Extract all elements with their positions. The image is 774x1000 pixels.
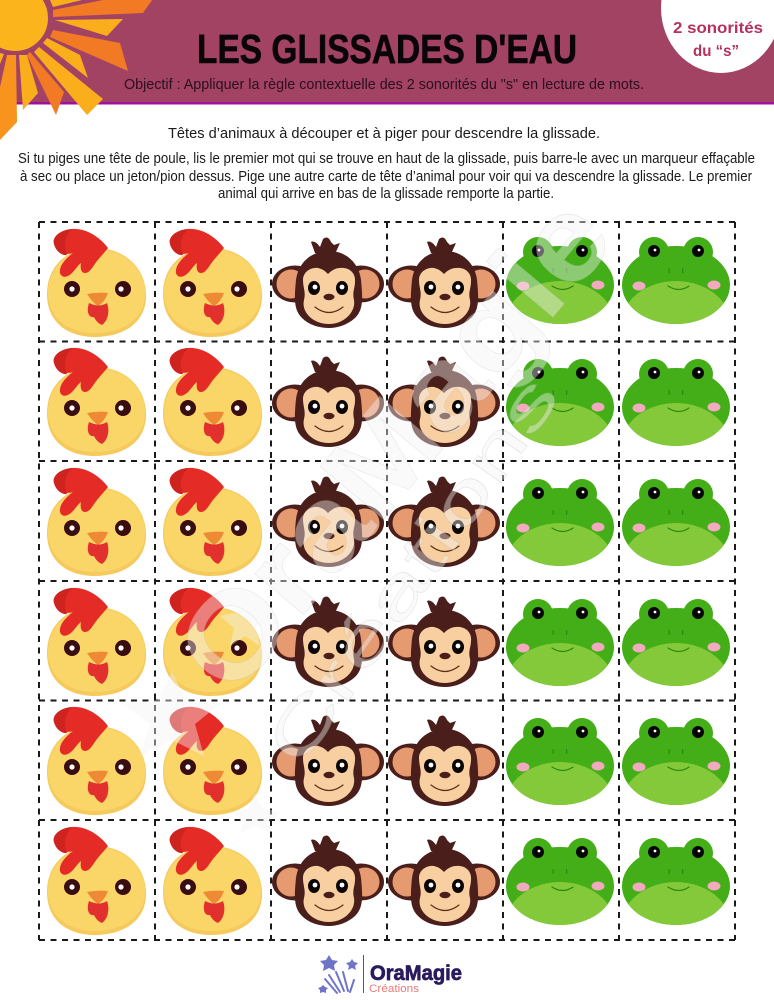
watermark: OraMagie xyxy=(149,171,638,717)
icon: monkey xyxy=(388,597,500,687)
icon: chicken xyxy=(163,707,262,815)
icon: frog xyxy=(621,479,731,611)
icon: chicken xyxy=(47,827,146,935)
icon: chicken xyxy=(47,229,146,337)
row 6 xyxy=(47,827,731,970)
icon: chicken xyxy=(47,468,146,576)
icon: monkey xyxy=(272,238,384,328)
instructions text: animal qui arrive en bas de la glissade remporte la partie. xyxy=(218,186,554,202)
watermark xyxy=(122,171,638,833)
icon: monkey xyxy=(388,716,500,806)
row 1 xyxy=(47,229,731,369)
logo: OraMagie Créations: OraMagie xyxy=(370,962,462,985)
icon: frog xyxy=(505,838,615,970)
icon: frog xyxy=(621,718,731,850)
icon: monkey xyxy=(272,597,384,687)
row 2 xyxy=(47,348,731,491)
header band xyxy=(0,0,774,102)
instructions text: Têtes d’animaux à découper et à piger pour descendre la glissade. xyxy=(168,125,600,142)
icon: chicken xyxy=(163,588,262,696)
badge: 2 sonorités du s: 2 sonorités xyxy=(673,20,763,37)
icon: sun xyxy=(0,0,152,140)
icon: chicken xyxy=(163,827,262,935)
icon: frog xyxy=(505,359,615,491)
badge: 2 sonorités du s: du “s” xyxy=(693,43,739,60)
logo: OraMagie Créations: Créations xyxy=(369,983,420,995)
cut lines xyxy=(39,222,735,940)
watermark: Créations xyxy=(251,362,573,778)
row 3 xyxy=(47,468,731,611)
row 4 xyxy=(47,588,731,731)
icon: chicken xyxy=(47,707,146,815)
icon: chicken xyxy=(163,348,262,456)
icon: frog xyxy=(505,237,615,369)
icon: frog xyxy=(505,479,615,611)
objective subtitle: Objectif : Appliquer la règle contextuelle des 2 sonorités du "s" en lecture de mots. xyxy=(124,77,644,93)
icon: frog xyxy=(621,237,731,369)
icon: monkey xyxy=(388,357,500,447)
badge: 2 sonorités du s xyxy=(661,0,774,73)
icon: monkey xyxy=(272,357,384,447)
header underline xyxy=(0,102,774,104)
icon: frog xyxy=(621,599,731,731)
icon: frog xyxy=(621,359,731,491)
icon: chicken xyxy=(47,588,146,696)
animal cards grid xyxy=(47,229,731,970)
icon: monkey xyxy=(388,477,500,567)
icon: frog xyxy=(505,718,615,850)
icon: monkey xyxy=(272,716,384,806)
icon: monkey xyxy=(388,238,500,328)
instructions text xyxy=(18,125,755,202)
row 5 xyxy=(47,707,731,850)
icon: frog xyxy=(505,599,615,731)
title: LES GLISSADES D'EAU xyxy=(197,26,577,72)
icon: chicken xyxy=(163,468,262,576)
icon: monkey xyxy=(272,477,384,567)
icon: monkey xyxy=(272,836,384,926)
logo: OraMagie Créations xyxy=(318,955,462,995)
icon: fireworks xyxy=(318,955,358,993)
icon: chicken xyxy=(163,229,262,337)
icon: frog xyxy=(621,838,731,970)
icon: chicken xyxy=(47,348,146,456)
icon: monkey xyxy=(388,836,500,926)
